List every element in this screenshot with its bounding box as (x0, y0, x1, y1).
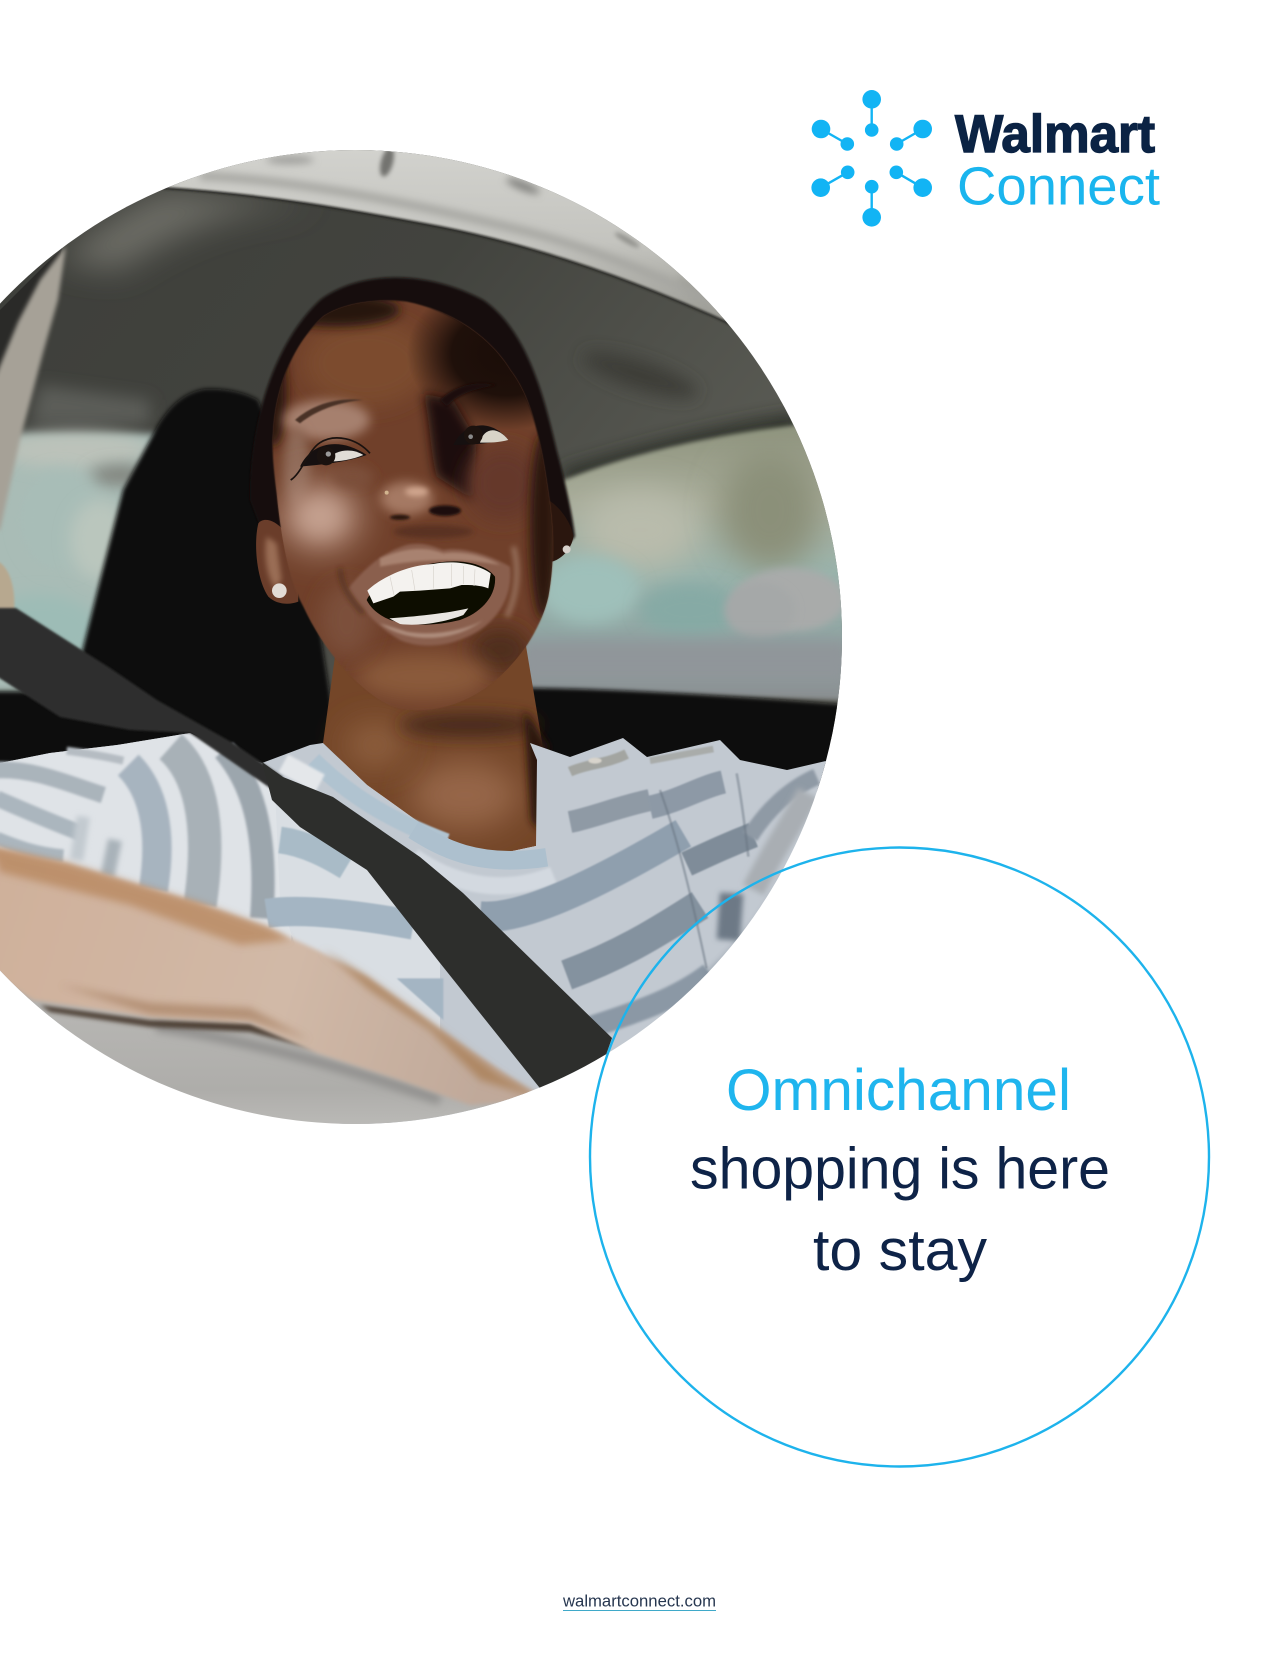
right eyebrow (440, 383, 497, 407)
sun visor and roof lining (163, 150, 730, 326)
dark dashboard band (515, 688, 850, 790)
car ceiling (0, 140, 850, 740)
seatbelt across chest (262, 762, 612, 1100)
upper teeth (367, 562, 491, 603)
left eyebrow (295, 399, 363, 423)
steering hand at left edge (0, 562, 16, 609)
headline (690, 1058, 1110, 1283)
right eye (453, 425, 508, 445)
lower teeth (389, 608, 468, 625)
door pillar (0, 246, 66, 560)
wordmark: Walmart: Walmart (955, 105, 1155, 164)
headline: to stay: to stay (813, 1218, 987, 1283)
photo: smiling woman driving a car, circular crop (0, 110, 850, 1150)
arm warm upper edge (0, 846, 290, 945)
arm warm lower edge (323, 950, 545, 1100)
left sleeve white base (0, 733, 300, 950)
left side window, blurred scenery (0, 421, 156, 694)
wordmark: Connect: Connect (957, 156, 1160, 216)
Walmart Connect logo (811, 90, 1160, 227)
neck (323, 646, 550, 851)
right ear and earring (548, 500, 573, 562)
headline ring (590, 848, 1209, 1466)
chest white base (282, 810, 440, 1028)
woman's head (250, 277, 607, 710)
headline: shopping is here: shopping is here (690, 1136, 1110, 1202)
smile creases (340, 568, 363, 613)
nose stud (385, 491, 389, 495)
left sleeve and chest stripes (0, 747, 447, 1020)
right shirt stripes (413, 749, 817, 1028)
hair, neck, shirt, belt, arm and sill (0, 608, 850, 1150)
face light and shadow modelling (273, 300, 553, 704)
face (272, 300, 554, 658)
lips (348, 544, 511, 646)
left ear (256, 520, 298, 604)
tooth gaps (390, 564, 475, 595)
seatbelt upper section (0, 608, 283, 790)
icon: connected dots spark (811, 90, 932, 227)
ceiling soft shading (30, 190, 800, 490)
footer link: walmartconnect.com (562, 1592, 716, 1610)
left eye (291, 438, 370, 480)
shadow below arm (40, 1005, 317, 1050)
headline: omnichannel: Omnichannel (726, 1058, 1071, 1123)
door sill (0, 970, 528, 1124)
open mouth (367, 561, 495, 625)
shirt body (0, 733, 850, 1140)
forearm (0, 846, 545, 1105)
hair (250, 277, 575, 560)
driver seat headrest and dark interior (0, 389, 340, 790)
right side window, blurred scenery (520, 420, 850, 700)
